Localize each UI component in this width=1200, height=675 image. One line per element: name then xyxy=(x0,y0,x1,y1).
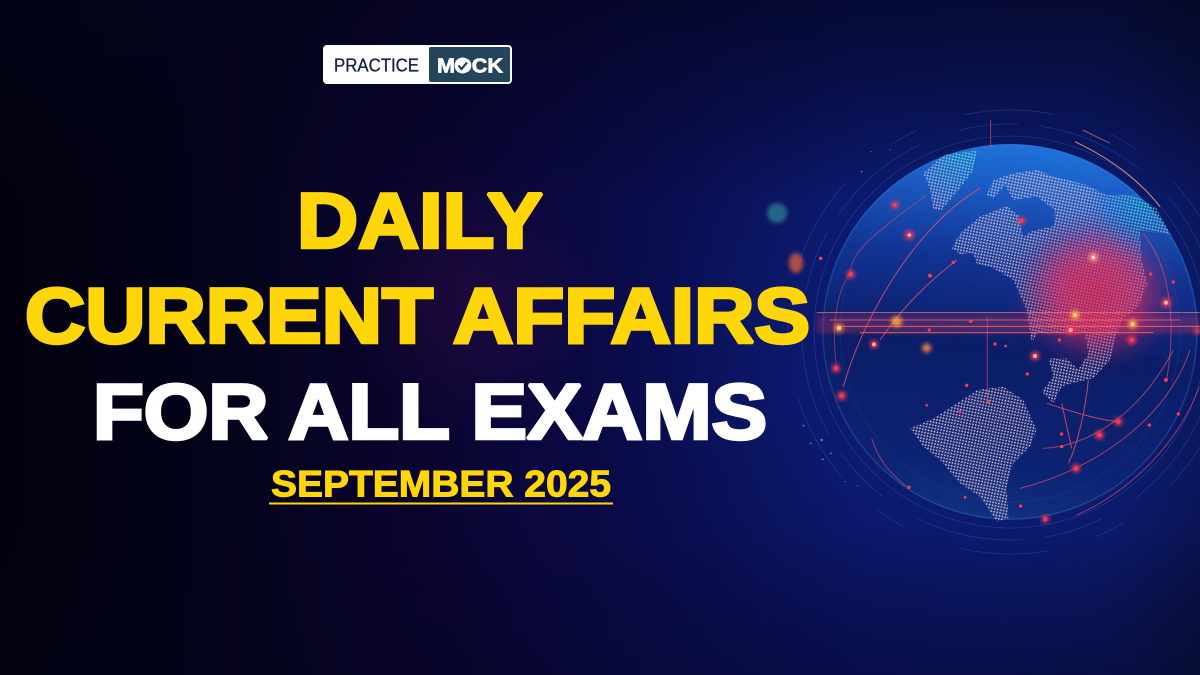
equatorial light band xyxy=(817,313,1200,333)
logo: PracticeMock xyxy=(323,45,512,84)
icon: teal bokeh xyxy=(767,203,787,223)
icon: orange bokeh xyxy=(789,253,803,273)
network arcs xyxy=(834,120,1199,515)
icon: check in O xyxy=(454,58,470,74)
date underline xyxy=(269,502,613,504)
globe sphere xyxy=(822,144,1198,520)
title line: FOR ALL EXAMS: FOR ALL EXAMS xyxy=(93,368,767,456)
icon: globe with network xyxy=(760,110,1200,554)
dotted continents xyxy=(910,151,1170,522)
outer orbit rings xyxy=(788,110,1200,554)
title line: DAILY: DAILY xyxy=(297,176,543,264)
network nodes xyxy=(819,201,1200,523)
title line: CURRENT AFFAIRS: CURRENT AFFAIRS xyxy=(25,272,810,360)
scattered cyan data dots xyxy=(802,149,891,487)
logo: PracticeMock: MOCK xyxy=(437,56,504,78)
red continental glow xyxy=(1037,240,1157,347)
date: SEPTEMBER 2025: SEPTEMBER 2025 xyxy=(271,464,611,504)
logo: PracticeMock: PRACTICE xyxy=(334,56,419,76)
